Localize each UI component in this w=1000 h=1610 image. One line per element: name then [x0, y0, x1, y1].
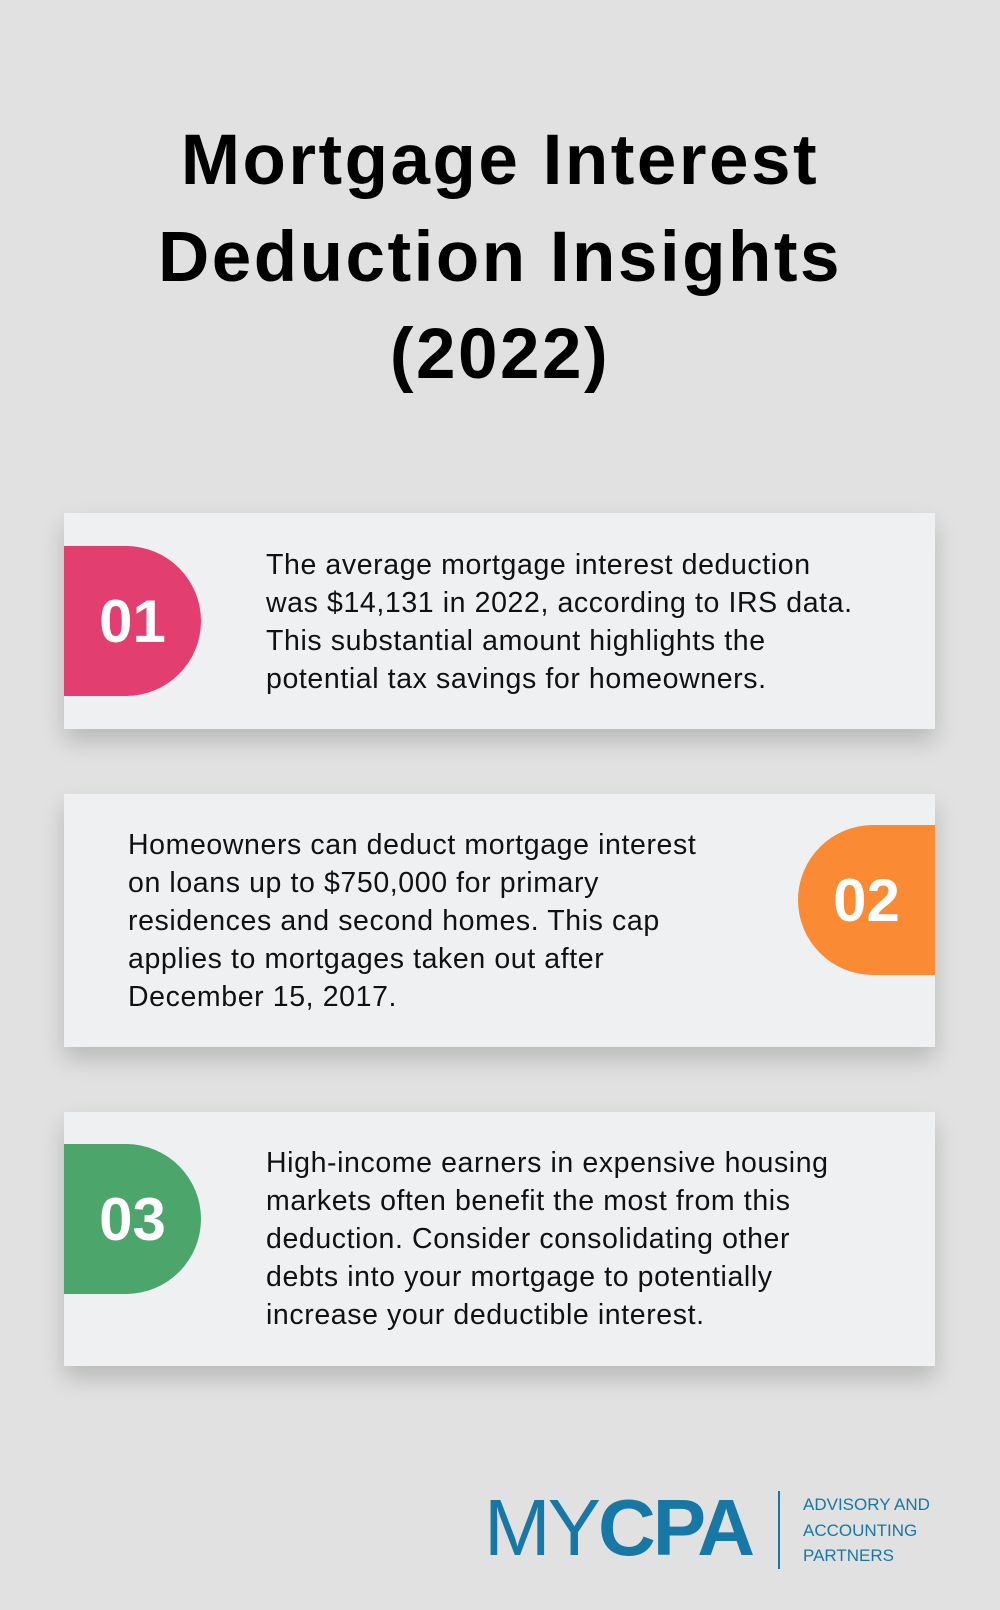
text 3: markets often benefit the most from this	[266, 1185, 791, 1217]
text 1: This substantial amount highlights the	[266, 625, 766, 657]
badge 02: 02	[833, 866, 900, 934]
panel: card 3	[64, 1112, 935, 1366]
logo	[484, 1483, 930, 1572]
panel: card 1	[64, 513, 935, 729]
text 3: debts into your mortgage to potentially	[266, 1261, 773, 1293]
text 2: residences and second homes. This cap	[128, 905, 660, 937]
badge 03: 03	[99, 1186, 166, 1252]
text 2: December 15, 2017.	[128, 981, 397, 1013]
title: Mortgage Interest	[181, 121, 819, 200]
badge 01	[64, 546, 201, 696]
text 1	[266, 549, 853, 695]
text 1: potential tax savings for homeowners.	[266, 663, 767, 695]
title	[158, 121, 842, 394]
text 2: on loans up to $750,000 for primary	[128, 867, 599, 899]
logo: ACCOUNTING	[803, 1520, 917, 1540]
badge 02	[798, 825, 935, 975]
text 1: was $14,131 in 2022, according to IRS data.	[266, 587, 853, 619]
text 2: applies to mortgages taken out after	[128, 943, 604, 975]
text 3: deduction. Consider consolidating other	[266, 1223, 790, 1255]
text 2	[128, 829, 696, 1013]
text 3: increase your deductible interest.	[266, 1299, 705, 1331]
logo: PARTNERS	[803, 1546, 894, 1565]
text 3	[266, 1147, 829, 1331]
text 3: High-income earners in expensive housing	[266, 1147, 829, 1179]
logo: MYCPA	[484, 1483, 752, 1572]
text 2: Homeowners can deduct mortgage interest	[128, 829, 696, 861]
panel: card 2	[64, 794, 935, 1047]
logo: ADVISORY AND	[803, 1495, 930, 1514]
text 1: The average mortgage interest deduction	[266, 549, 811, 581]
title: (2022)	[390, 315, 610, 394]
badge 01: 01	[99, 588, 166, 654]
badge 03	[64, 1144, 201, 1294]
title: Deduction Insights	[158, 218, 842, 297]
